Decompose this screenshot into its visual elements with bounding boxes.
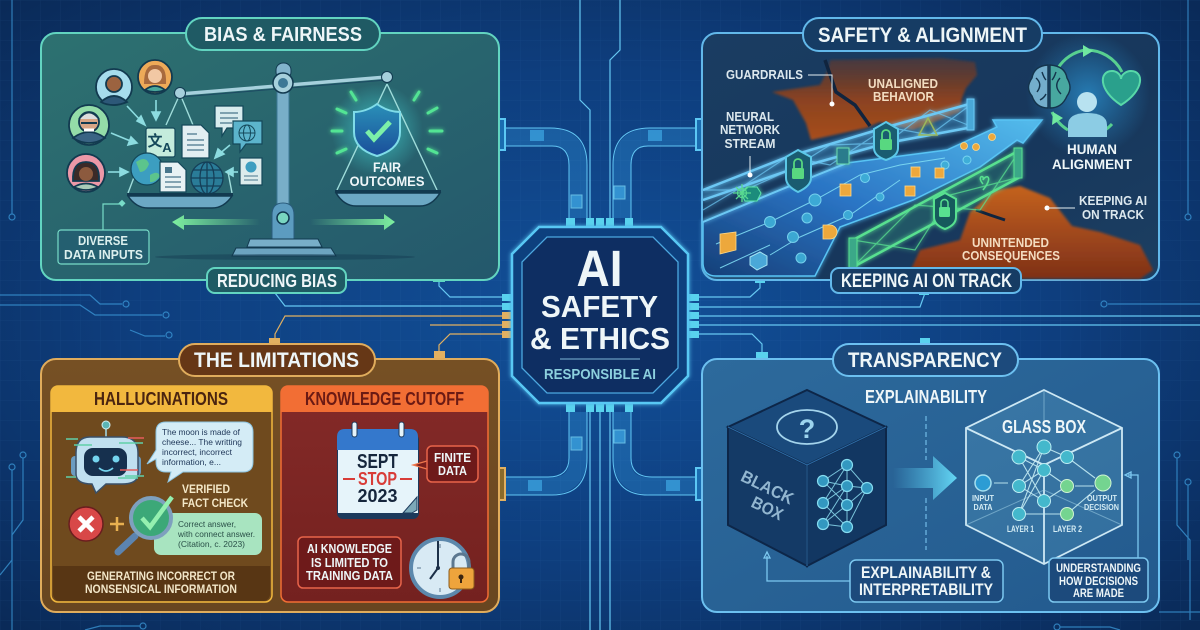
heading: transparency: TRANSPARENCY xyxy=(848,349,1002,372)
wire globe xyxy=(191,162,223,194)
news card xyxy=(240,158,262,185)
layer labels: INPUT xyxy=(972,493,995,503)
fair outcomes label xyxy=(350,159,424,189)
callout: diverse data inputs xyxy=(58,200,149,264)
callout: explainability and interpretability: INTERPRETABILITY xyxy=(859,580,994,599)
heading: bias and fairness xyxy=(186,18,380,50)
badge: reducing bias: REDUCING BIAS xyxy=(217,271,337,291)
callout: understanding how decisions are made: UNDERSTANDING xyxy=(1056,561,1141,575)
label: explainability: EXPLAINABILITY xyxy=(865,387,987,407)
card: knowledge cutoff: KNOWLEDGE CUTOFF xyxy=(305,389,464,409)
label: neural network stream xyxy=(720,109,781,178)
heading: transparency xyxy=(833,344,1018,376)
human alignment cycle xyxy=(1026,33,1150,157)
label: verified fact check xyxy=(182,482,248,510)
diverse people avatars xyxy=(67,60,172,192)
answer box: Correct answer, xyxy=(178,519,236,529)
label: glass box: GLASS BOX xyxy=(1002,417,1086,437)
connector tube: top right xyxy=(613,119,707,218)
scale pan strings: left xyxy=(128,94,232,193)
panel: bias and fairness xyxy=(41,18,499,293)
document xyxy=(182,125,209,158)
chip title: AI xyxy=(576,240,622,297)
neural network layers xyxy=(975,440,1111,520)
fair outcomes shield xyxy=(331,84,442,190)
icon: calendar stop date: 2023 xyxy=(358,486,398,506)
panel: safety and alignment xyxy=(702,18,1159,293)
icon: red cross xyxy=(69,507,103,541)
speech bubble: hallucination: incorrect, incorrect xyxy=(162,447,233,457)
speech bubble: hallucination: information, e... xyxy=(162,457,221,467)
icon: brain xyxy=(1028,65,1070,108)
card: hallucinations xyxy=(51,386,272,602)
label: black box: BLACK xyxy=(738,467,797,509)
answer box: with connect answer. xyxy=(177,529,255,539)
callout: diverse data inputs: DIVERSE xyxy=(78,233,128,248)
icon: person xyxy=(1068,92,1107,137)
callout: understanding how decisions are made xyxy=(1049,472,1148,602)
callout: understanding how decisions are made: ARE MADE xyxy=(1073,586,1124,600)
label: black box: BOX xyxy=(748,493,787,525)
layer labels: LAYER 2 xyxy=(1053,524,1082,534)
answer box: (Citation, c. 2023) xyxy=(178,539,245,549)
glass box cube xyxy=(966,390,1122,564)
data icons xyxy=(131,106,262,194)
callout: diverse data inputs: DATA INPUTS xyxy=(64,247,143,262)
label: unintended consequences xyxy=(962,235,1060,263)
callout: training data limit: TRAINING DATA xyxy=(306,568,394,583)
label: verified fact check: VERIFIED xyxy=(182,482,230,496)
bus traces xyxy=(275,0,1200,630)
callout: explainability and interpretability xyxy=(764,552,1003,602)
layer labels: OUTPUT xyxy=(1087,493,1118,503)
panel: the limitations xyxy=(41,344,499,612)
layer labels: DATA xyxy=(974,502,992,512)
panel: transparency xyxy=(702,344,1159,612)
data input arrows xyxy=(108,100,238,176)
connector tube: bottom left xyxy=(494,412,587,500)
label: neural network stream: STREAM xyxy=(724,136,776,151)
callout: finite data: DATA xyxy=(438,463,468,478)
label: neural network stream: NEURAL xyxy=(726,109,774,124)
data stream arrow xyxy=(703,120,1042,276)
hazard: unaligned behavior terrain xyxy=(772,58,977,140)
label: unintended consequences: UNINTENDED xyxy=(972,235,1049,250)
callout: training data limit: AI KNOWLEDGE xyxy=(307,541,392,556)
icon: calendar stop date: STOP xyxy=(358,469,397,489)
caption: hallucinations: NONSENSICAL INFORMATION xyxy=(85,582,237,596)
icon: calendar stop date xyxy=(337,422,419,519)
heading: bias and fairness: BIAS & FAIRNESS xyxy=(204,24,362,46)
translate card: A xyxy=(162,140,172,155)
caption: hallucinations xyxy=(85,569,237,596)
label: guardrails xyxy=(726,67,834,106)
caption: hallucinations: GENERATING INCORRECT OR xyxy=(87,569,235,583)
heading: safety and alignment xyxy=(803,18,1042,51)
badge: reducing bias xyxy=(207,268,346,293)
icon: clock with lock xyxy=(411,539,474,597)
label: unaligned behavior: UNALIGNED xyxy=(868,76,938,91)
label: human alignment xyxy=(1052,141,1132,172)
label: guardrails: GUARDRAILS xyxy=(726,67,803,82)
heading: the limitations xyxy=(179,344,375,376)
question mark badge xyxy=(777,410,837,444)
label: human alignment: ALIGNMENT xyxy=(1052,156,1132,172)
icon: neural network node xyxy=(733,184,751,202)
icon: heart xyxy=(1103,71,1140,105)
label: verified fact check: FACT CHECK xyxy=(182,496,248,510)
layer labels: DECISION xyxy=(1084,502,1119,512)
connector tube: bottom right xyxy=(613,412,707,500)
guardrail: lock shields xyxy=(786,122,898,192)
label: keeping ai on track xyxy=(1044,193,1147,222)
label: keeping ai on track: ON TRACK xyxy=(1082,207,1145,222)
callout: finite data: FINITE xyxy=(434,450,471,465)
layer labels xyxy=(972,493,1119,534)
icon: glitching robot xyxy=(66,421,144,493)
central bus connections xyxy=(269,0,1200,630)
label: neural network stream: NETWORK xyxy=(720,122,781,137)
green balance arrows xyxy=(172,214,395,230)
right scale pan xyxy=(335,190,441,206)
icon: magnifier check xyxy=(118,497,172,552)
chip title xyxy=(530,240,670,356)
callout: explainability and interpretability: EXPLAINABILITY & xyxy=(861,563,991,582)
chip subtitle: RESPONSIBLE AI xyxy=(544,366,656,383)
label: human alignment: HUMAN xyxy=(1067,141,1117,157)
label: unaligned behavior: BEHAVIOR xyxy=(873,89,935,104)
heading: safety and alignment: SAFETY & ALIGNMENT xyxy=(818,24,1027,47)
question mark badge: ? xyxy=(799,414,815,444)
layer labels: LAYER 1 xyxy=(1007,524,1034,534)
scale beam and stand xyxy=(155,63,415,260)
chip title: SAFETY xyxy=(541,289,658,324)
hazard: unintended consequences terrain xyxy=(907,186,1153,279)
label: keeping ai on track: KEEPING AI xyxy=(1079,193,1147,208)
speech bubble: hallucination: The moon is made of xyxy=(162,427,241,437)
callout: finite data xyxy=(413,446,478,482)
translate card xyxy=(146,128,175,157)
callout: training data limit xyxy=(298,537,401,588)
callout: training data limit: IS LIMITED TO xyxy=(311,555,388,570)
speech bubble: hallucination: cheese... The writting xyxy=(162,437,242,447)
chip pins xyxy=(269,218,930,412)
left scale pan xyxy=(127,193,233,208)
icon: calendar stop date: SEPT xyxy=(357,451,398,473)
neural network on cube xyxy=(818,460,872,532)
guardrail: green rail xyxy=(849,148,1022,268)
chip title: & ETHICS xyxy=(530,321,670,356)
translate card: 文 xyxy=(147,132,163,150)
fair outcomes label: OUTCOMES xyxy=(350,173,424,189)
central chip xyxy=(512,227,688,403)
card: knowledge cutoff xyxy=(281,386,488,602)
connector tube: top left xyxy=(493,119,587,218)
black box cube xyxy=(728,390,886,566)
card: hallucinations: HALLUCINATIONS xyxy=(94,389,228,409)
fair outcomes label: FAIR xyxy=(373,159,401,175)
label: unaligned behavior xyxy=(868,76,938,104)
speech bubble: hallucination xyxy=(147,422,253,482)
badge: keeping ai on track xyxy=(831,268,1021,293)
callout: understanding how decisions are made: HOW DECISIONS xyxy=(1059,574,1138,588)
globe xyxy=(131,153,163,185)
icon: plus xyxy=(110,517,124,531)
globe chat bubble xyxy=(233,121,262,152)
document two xyxy=(160,162,186,192)
divider and arrow: black box to glass box xyxy=(893,416,957,550)
badge: keeping ai on track: KEEPING AI ON TRACK xyxy=(841,271,1012,292)
label: unintended consequences: CONSEQUENCES xyxy=(962,248,1060,263)
heading: the limitations: THE LIMITATIONS xyxy=(194,349,359,372)
guardrail: top rail xyxy=(703,99,974,222)
answer box xyxy=(154,513,262,555)
chat bubble xyxy=(215,106,243,136)
